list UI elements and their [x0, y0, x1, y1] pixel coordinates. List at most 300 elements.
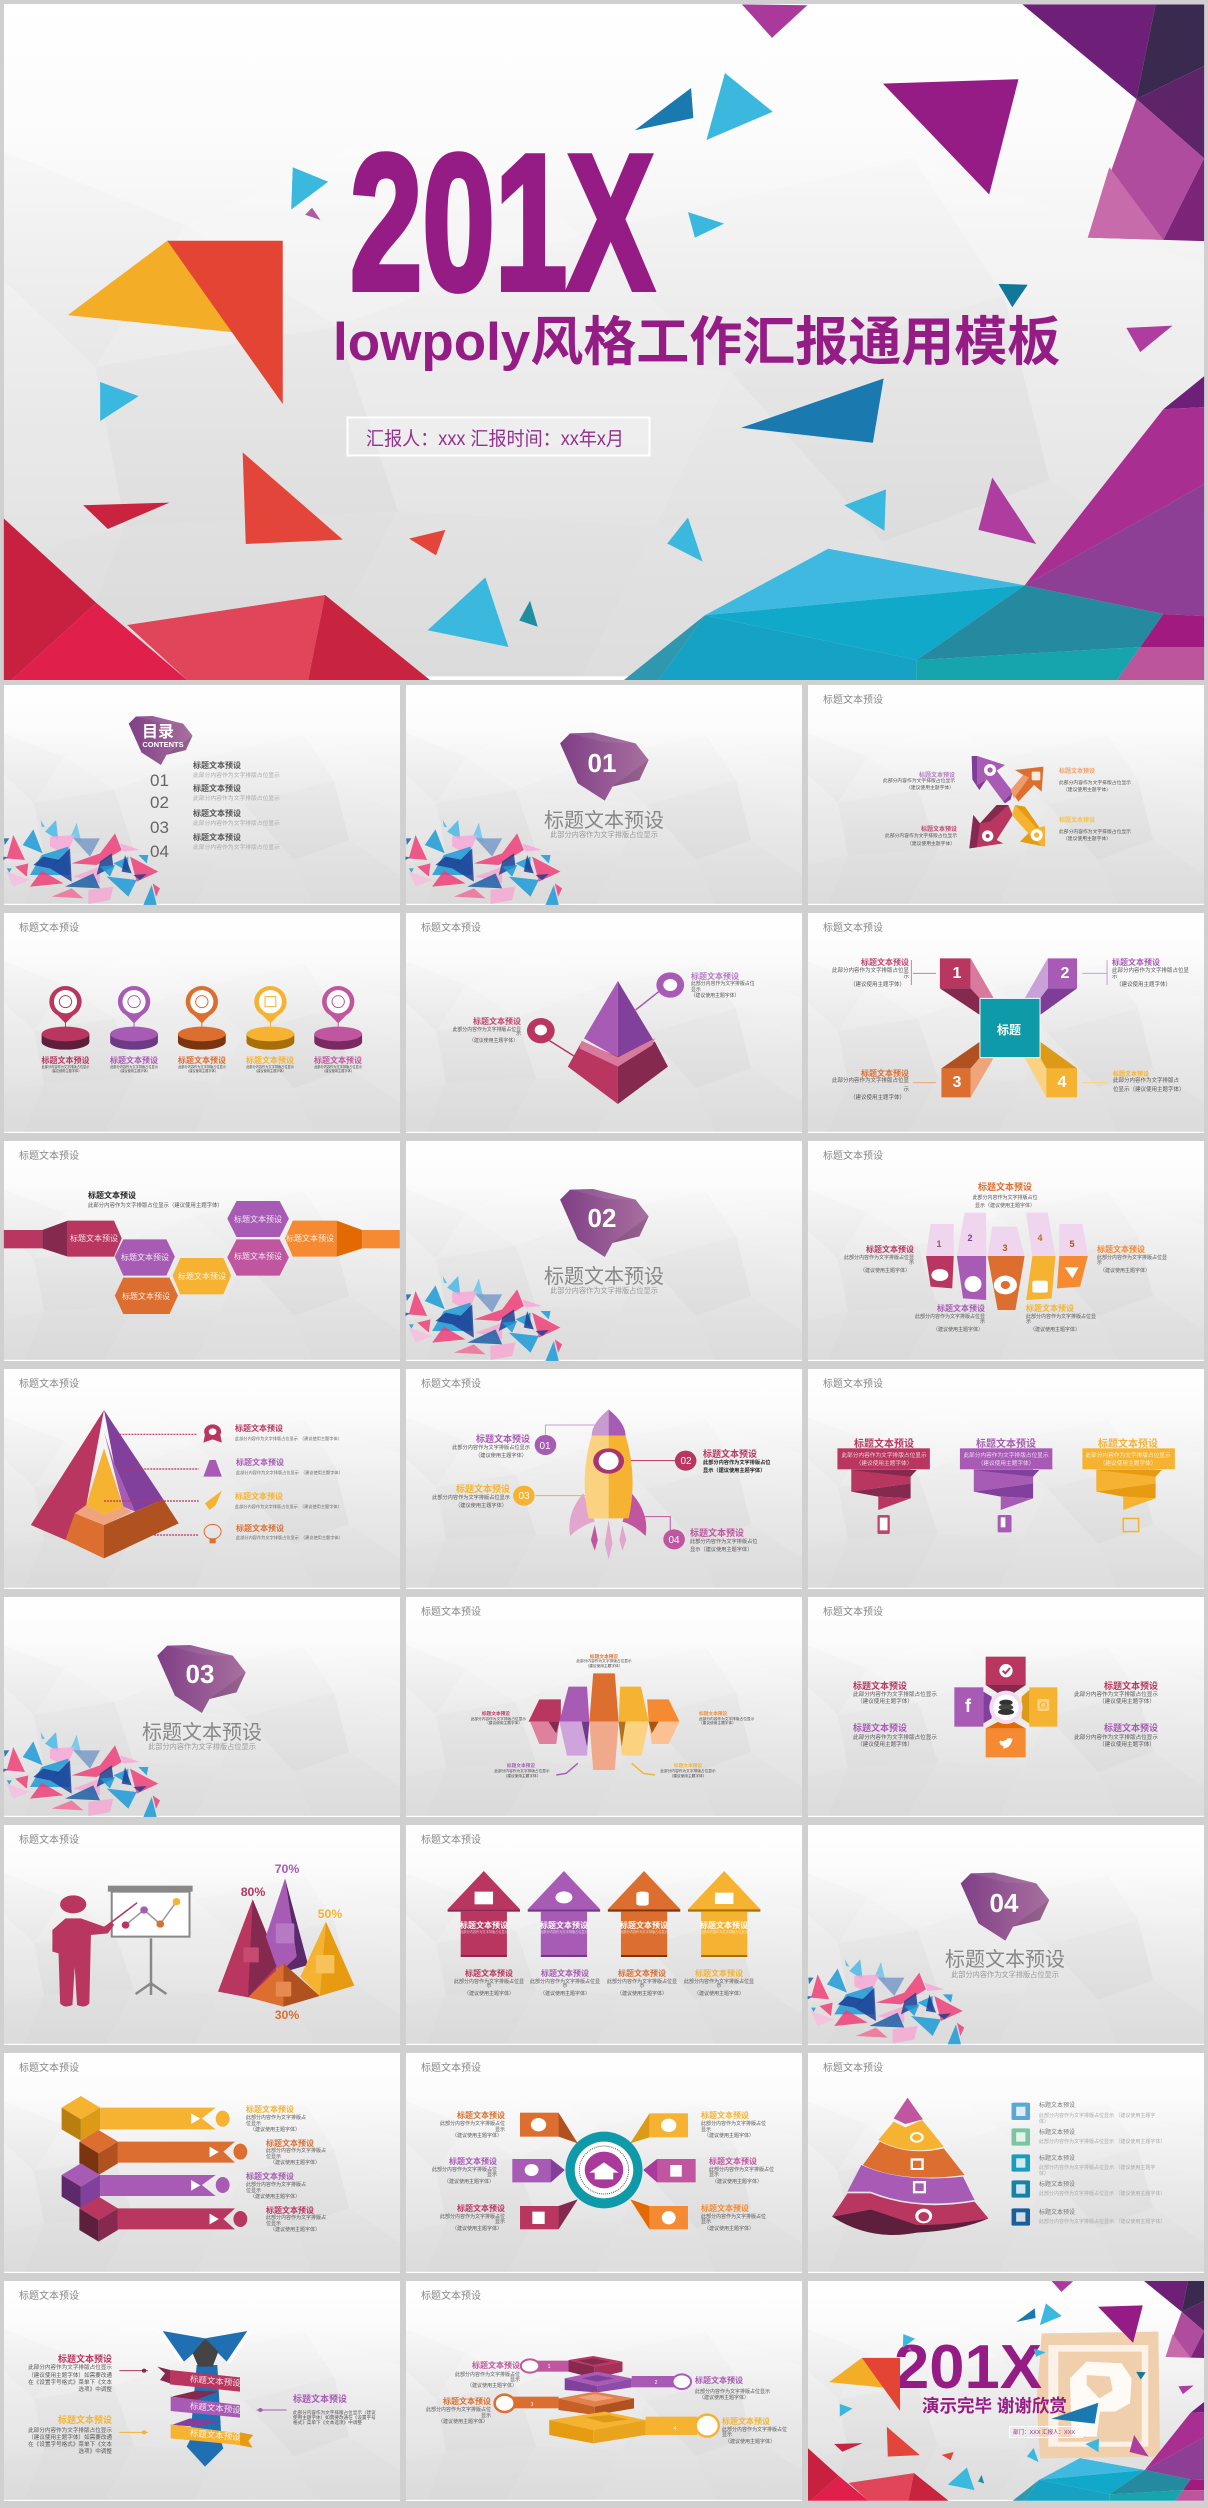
mosaic of triangles: [3, 820, 160, 905]
hub labels: 显示: [495, 2219, 505, 2225]
presenter info box: [348, 418, 650, 456]
social cross labels: 标题文本预设: [853, 1680, 907, 1691]
pyramid labels: 此部分内容作为文字排版占位显示 （建议使用主题字体）: [235, 1503, 342, 1510]
rocket labels: 标题文本预设: [456, 1483, 510, 1494]
section title: 标题文本预设: [544, 809, 664, 832]
slide heading: 标题文本预设: [823, 1605, 883, 1618]
arrow labels: 此部分内容作为文字排版占位显: [454, 1978, 524, 1985]
column numbers: [936, 1233, 1075, 1253]
pyramid labels: 此部分内容作为文字排版占位显示 （建议使用主题字体）: [235, 1435, 342, 1442]
box labels: 标题文本预设: [443, 2396, 491, 2406]
pin labels: 标题文本预设: [314, 1055, 362, 1065]
rocket labels: 标题文本预设: [476, 1433, 530, 1444]
four crossing arrows graphic: [969, 756, 1045, 848]
section badge 04: 04: [990, 1888, 1019, 1918]
X shape labels: （建议使用主题字体）: [1116, 980, 1171, 988]
X shape labels: 标题文本预设: [861, 1068, 909, 1078]
funnel labels: 标题文本预设: [976, 1437, 1036, 1450]
ribbon labels: 此部分内容作为文字排版占: [266, 2147, 326, 2154]
rocket labels: 此部分内容作为文字排版占位显示: [432, 1493, 510, 1501]
slide heading: 标题文本预设: [19, 2061, 79, 2074]
ribbon labels: 标题文本预设: [266, 2205, 314, 2215]
hexagon caption: [88, 1190, 223, 1209]
contents list: 此部分内容作为文字排版占位显示: [193, 843, 280, 851]
tie side labels: [28, 2353, 376, 2455]
peak bar labels: 此部分内容作为文字排版占位显示: [471, 1716, 526, 1721]
panel: presenter and mountains slide: [4, 1825, 400, 2045]
box labels: （建议使用主题字体）: [699, 2394, 749, 2401]
contents list: 标题文本预设: [193, 832, 241, 842]
panel: hero cover slide: [4, 4, 1204, 680]
panel: five social columns slide: [808, 1141, 1204, 1361]
box labels: 标题文本预设: [722, 2416, 770, 2426]
tie connector lines: [119, 2369, 287, 2434]
diamond labels: 此部分内容作为文字排版占位显: [453, 1026, 521, 1033]
X shape numbers and center label: 3: [953, 1074, 962, 1091]
column labels: 此部分内容作为文字排版占位显: [1097, 1254, 1167, 1261]
tie side labels: 在《设置字号格式》菜单下《文本: [28, 2378, 112, 2386]
tie side labels: （建议使用主题字体）如需要改通: [28, 2433, 112, 2441]
tie side labels: 此部分内容作为文字排版占位显示（建议: [293, 2409, 376, 2416]
slide heading: 标题文本预设: [823, 2061, 883, 2074]
ribbon labels: [246, 2104, 326, 2233]
pin labels: 标题文本预设: [110, 1055, 158, 1065]
cone list text: 标题文本预设: [1039, 2154, 1075, 2162]
labels for arrows: [883, 767, 1131, 847]
X shape labels: 示: [903, 1086, 909, 1093]
contents badge: 目录: [142, 723, 174, 741]
up arrows graphic: [448, 1871, 760, 1957]
hub labels: 此部分内容作为文字排版占位: [709, 2166, 774, 2173]
ribbon band labels: 标题文本预设: [189, 2401, 242, 2415]
ribbon band labels: 标题文本预设: [189, 2374, 242, 2388]
funnel labels: 标题文本预设: [1098, 1437, 1158, 1450]
slide heading: 标题文本预设: [19, 921, 79, 934]
panel: closing slide: [808, 2281, 1204, 2501]
panel: contents slide: [3, 685, 400, 905]
mosaic of triangles: [405, 820, 562, 905]
hub labels: 标题文本预设: [701, 2203, 749, 2213]
arrow labels: 标题文本预设: [541, 1968, 589, 1978]
hexagon labels: 标题文本预设: [178, 1271, 226, 1281]
pyramid labels: 此部分内容作为文字排版占位显示 （建议使用主题字体）: [236, 1534, 343, 1541]
funnel labels: （建议使用主题字体）: [1100, 1459, 1156, 1467]
peak bar labels: （建议使用主题字体）: [485, 1720, 522, 1725]
tie side labels: 标题文本预设: [58, 2414, 112, 2425]
arrow labels: 标题文本预设: [695, 1968, 743, 1978]
arrow labels: 此部分内容作为文字排版占位显示: [620, 1929, 668, 1934]
social cross labels: 标题文本预设: [1104, 1722, 1158, 1733]
arrow labels: 此部分内容作为文字排版占位显: [684, 1978, 754, 1985]
slide heading: 标题文本预设: [19, 1833, 79, 1846]
arrow labels: （建议使用主题字体）: [617, 1990, 667, 1997]
hub labels: （建议使用主题字体）: [704, 2225, 754, 2232]
tie side labels: 此部分内容作为文字排版占位显示: [28, 2363, 112, 2371]
labels for arrows: 此部分内容作为文字排版占位显示: [885, 832, 957, 839]
panel: social cross slide: [808, 1597, 1204, 1817]
X shape labels: 标题文本预设: [1113, 1070, 1149, 1078]
section badge 01: [560, 733, 649, 801]
arrow labels: 示: [716, 1983, 722, 1989]
box labels: 显示: [481, 2413, 491, 2419]
closing info box: [1010, 2426, 1082, 2438]
box numbers: 2: [655, 2380, 658, 2386]
hexagon labels: 标题文本预设: [121, 1252, 169, 1262]
column labels: 示: [1026, 1319, 1031, 1325]
funnel labels: 标题文本预设: [854, 1437, 914, 1450]
pyramid labels: 此部分内容作为文字排版占位显示 （建议使用主题字体）: [236, 1469, 343, 1476]
hexagon labels: 标题文本预设: [70, 1233, 118, 1243]
panel: section 03 slide: [3, 1597, 400, 1817]
arrow labels: 示: [486, 1983, 492, 1989]
cone list text: 标题文本预设: [1039, 2208, 1075, 2216]
cone list text: 此部分内容作为文字排版占位显示 （建议使用主题字体）: [1039, 2138, 1165, 2145]
section title: 此部分内容作为文字排版占位显示: [951, 1970, 1059, 1979]
column labels: 显示（建议使用主题字体）: [975, 1202, 1035, 1209]
hub labels: 显示: [701, 2127, 711, 2133]
pyramid labels: 标题文本预设: [235, 1491, 283, 1501]
cone list text: 此部分内容作为文字排版占位显示 （建议使用主题字体）: [1039, 2218, 1165, 2225]
panel: isometric boxes slide: [406, 2281, 802, 2501]
panel: hexagon chain slide: [4, 1141, 400, 1361]
X shape labels: 此部分内容作为文字排版占位显: [1112, 966, 1190, 974]
X shape numbers and center label: 标题: [997, 1022, 1021, 1037]
pin labels: 此部分内容作为文字排版占位显示: [246, 1064, 294, 1069]
hexagon labels: 标题文本预设: [234, 1214, 282, 1224]
contents list: 此部分内容作为文字排版占位显示: [193, 794, 280, 802]
funnel labels: [841, 1437, 1171, 1467]
contents list: [150, 760, 280, 861]
pyramid labels: 标题文本预设: [235, 1423, 283, 1433]
X shape labels: （建议使用主题字体）: [850, 1093, 905, 1101]
hub labels: 标题文本预设: [457, 2110, 505, 2120]
slide heading: 标题文本预设: [421, 2061, 481, 2074]
tie side labels: 使用主题字体）如需要改通在《设置字号: [293, 2414, 376, 2421]
box labels: 此部分内容作为文字排版占位: [722, 2426, 787, 2433]
layered pyramid graphic: [31, 1410, 222, 1558]
diamond labels: 此部分内容作为文字排版占位: [691, 980, 755, 987]
ribbon labels: 此部分内容作为文字排版占: [246, 2181, 306, 2188]
arrow labels: 此部分内容作为文字排版占位显示: [540, 1929, 588, 1934]
mountains percentage chart: [218, 1878, 354, 2007]
ribbon tie graphic: [157, 2331, 253, 2467]
contents badge: [129, 716, 193, 765]
column labels: （建议使用主题字体）: [933, 1326, 983, 1333]
section title: 标题文本预设: [544, 1265, 664, 1288]
facebook glyph: f: [965, 1696, 972, 1716]
peak bars graphic: [528, 1673, 679, 1775]
arrow labels: 标题文本预设: [700, 1920, 748, 1930]
X shape numbers and center label: 1: [953, 965, 962, 982]
arrow labels: 标题文本预设: [540, 1920, 588, 1930]
social cross labels: （建议使用主题字体）: [1099, 1697, 1155, 1705]
rocket labels: 此部分内容作为文字排版占位: [690, 1537, 757, 1545]
box labels: [426, 2360, 787, 2445]
social cross labels: 标题文本预设: [853, 1722, 907, 1733]
tie side labels: 选项》中调整: [78, 2447, 112, 2455]
diamond labels: 显示: [691, 987, 701, 993]
rocket numbered badges: [518, 1441, 692, 1546]
panel: cube ribbons slide: [4, 2053, 400, 2273]
social cross labels: 此部分内容作为文字排版占位显示: [853, 1690, 937, 1698]
arrow labels: （建议使用主题字体）: [464, 1990, 514, 1997]
percentage labels: 30%: [275, 2008, 299, 2022]
pyramid labels: 标题文本预设: [236, 1523, 284, 1533]
cone list text: 标题文本预设: [1039, 2101, 1075, 2109]
box numbers: [531, 2364, 677, 2432]
arrow labels: 示: [639, 1983, 645, 1989]
arrow labels: 此部分内容作为文字排版占位显: [530, 1978, 600, 1985]
box numbers: 3: [531, 2402, 534, 2408]
panel: five pins slide: [4, 913, 400, 1133]
hub labels: 此部分内容作为文字排版占位: [701, 2213, 766, 2220]
labels for arrows: 标题文本预设: [919, 771, 955, 779]
box labels: 显示: [722, 2432, 732, 2438]
arrow labels: 标题文本预设: [460, 1920, 508, 1930]
rocket labels: 此部分内容作为文字排版占位显示: [452, 1443, 530, 1451]
contents list: 01: [150, 771, 169, 790]
rocket labels: （建议使用主题字体）: [455, 1501, 507, 1509]
rocket labels: 显示（建议使用主题字体）: [703, 1466, 765, 1474]
arrow labels: [454, 1920, 754, 1997]
arrow labels: 标题文本预设: [618, 1968, 666, 1978]
ribbon labels: 标题文本预设: [246, 2104, 294, 2114]
column labels: 标题文本预设: [1026, 1303, 1074, 1313]
diamond labels: 标题文本预设: [691, 971, 739, 981]
hexagon labels: [70, 1214, 334, 1301]
X shape numbers and center label: 4: [1058, 1074, 1067, 1091]
ribbon labels: （建议使用主题字体）: [270, 2226, 320, 2233]
column labels: 此部分内容作为文字排版占位显: [1026, 1313, 1096, 1320]
peak bar labels: （建议使用主题字体）: [504, 1773, 540, 1778]
rocket labels: [432, 1433, 770, 1553]
hub labels: 标题文本预设: [709, 2156, 757, 2166]
X shape numbers and center label: [953, 965, 1070, 1091]
panel: rocket slide: [406, 1369, 802, 1589]
peak bar labels: 标题文本预设: [699, 1710, 727, 1717]
mosaic of triangles: [405, 1276, 562, 1361]
slide heading: 标题文本预设: [421, 1605, 481, 1618]
slide heading: 标题文本预设: [823, 1149, 883, 1162]
cone list text: 标题文本预设: [1039, 2180, 1075, 2188]
peak bar labels: 标题文本预设: [590, 1653, 618, 1660]
funnel labels: 此部分内容作为文字排版占位显示: [841, 1451, 927, 1459]
slide heading: 标题文本预设: [19, 2289, 79, 2302]
section title: 此部分内容作为文字排版占位显示: [550, 830, 658, 839]
X shape labels: 示: [903, 973, 909, 980]
pin labels: （建议使用主题字体）: [322, 1068, 354, 1073]
ribbon labels: 标题文本预设: [266, 2138, 314, 2148]
cone list text: 此部分内容作为文字排版占位显示 （建议使用主题字: [1039, 2164, 1155, 2171]
panel: section 02 slide: [405, 1141, 802, 1361]
column labels: （建议使用主题字体）: [1030, 1326, 1080, 1333]
tie side labels: 在《设置字号格式》菜单下《文本: [28, 2440, 112, 2448]
arrow labels: 此部分内容作为文字排版占位显示: [460, 1929, 508, 1934]
peak bar labels: 此部分内容作为文字排版占位显示: [576, 1658, 632, 1663]
tie side labels: （建议使用主题字体）如需要改通: [28, 2371, 112, 2379]
rocket labels: 此部分内容作为文字排版占位: [703, 1458, 770, 1466]
social cross graphic: [954, 1657, 1057, 1757]
hexagon chain graphic: [4, 1201, 400, 1314]
diamond labels: [453, 971, 755, 1044]
hub labels: （建议使用主题字体）: [452, 2132, 502, 2139]
funnel labels: 此部分内容作为文字排版占位显示: [963, 1451, 1049, 1459]
isometric boxes graphic: [495, 2356, 719, 2443]
column labels: 标题文本预设: [978, 1181, 1032, 1192]
pin labels: （建议使用主题字体）: [186, 1068, 218, 1073]
labels for arrows: 此部分内容作为文字排版占位显示: [883, 777, 955, 784]
hub labels: 标题文本预设: [449, 2156, 497, 2166]
diamond pyramid graphic: [527, 972, 684, 1104]
rocket numbered badges: 01: [539, 1441, 551, 1452]
X shape labels: 此部分内容作为文字排版占位显: [832, 966, 909, 974]
rocket labels: 显示（建议使用主题字体）: [690, 1545, 752, 1553]
pin labels: 标题文本预设: [178, 1055, 226, 1065]
peak bar labels: 标题文本预设: [507, 1762, 535, 1769]
panel: X numbered slide: [808, 913, 1204, 1133]
box labels: 标题文本预设: [695, 2375, 743, 2385]
ribbon band labels: [189, 2374, 242, 2442]
rocket labels: （建议使用主题字体）: [475, 1451, 527, 1459]
slide heading: 标题文本预设: [823, 1377, 883, 1390]
icon squares: [1012, 2103, 1030, 2226]
X shape labels: 示: [1112, 973, 1118, 980]
hub labels: 此部分内容作为文字排版占位: [440, 2120, 505, 2127]
mosaic of triangles: [808, 1959, 964, 2044]
hub labels: （建议使用主题字体）: [712, 2178, 762, 2185]
section badge 04: [961, 1873, 1049, 1941]
arrow labels: 标题文本预设: [465, 1968, 513, 1978]
arrow labels: （建议使用主题字体）: [694, 1990, 744, 1997]
slide heading: 标题文本预设: [19, 1377, 79, 1390]
presenter with board graphic: [52, 1886, 193, 2006]
peak bar labels: （建议使用主题字体）: [699, 1720, 736, 1725]
hexagon caption: 标题文本预设: [88, 1190, 136, 1200]
panel: four arrows slide: [808, 685, 1204, 905]
social cross labels: [853, 1680, 1158, 1748]
column numbers: 2: [967, 1233, 973, 1243]
slide heading: 标题文本预设: [823, 921, 883, 934]
social cross labels: 此部分内容作为文字排版占位显示: [853, 1733, 937, 1741]
ribbon labels: 位显示: [246, 2187, 261, 2194]
diamond labels: 标题文本预设: [473, 1016, 521, 1026]
X shape labels: 此部分内容作为文字排版占位显: [832, 1076, 909, 1084]
section title: 标题文本预设: [945, 1948, 1065, 1971]
map pins on disks: [42, 986, 362, 1050]
pin labels: 此部分内容作为文字排版占位显示: [178, 1064, 226, 1069]
rocket labels: 标题文本预设: [703, 1448, 757, 1459]
column numbers: 3: [1002, 1243, 1008, 1253]
labels for arrows: （建议使用主题字体）: [1063, 786, 1111, 793]
subtitle: lowpoly风格工作汇报通用模板: [333, 313, 1060, 372]
contents list: 标题文本预设: [193, 808, 241, 818]
X shape labels: （建议使用主题字体）: [850, 980, 905, 988]
section badge 03: [157, 1645, 246, 1713]
panel: four up arrows slide: [406, 1825, 802, 2045]
pin labels: 此部分内容作为文字排版占位显示: [110, 1064, 158, 1069]
diamond labels: （建议使用主题字体）: [691, 992, 739, 999]
contents list: 标题文本预设: [193, 783, 241, 793]
cone list text: 体）: [1039, 2170, 1049, 2177]
pin labels: 此部分内容作为文字排版占位显示: [42, 1064, 89, 1069]
peak bar labels: （建议使用主题字体）: [670, 1773, 706, 1778]
ribbon labels: （建议使用主题字体）: [270, 2159, 320, 2166]
X shape labels: 位显示（建议使用主题字体）: [1113, 1085, 1185, 1093]
percentage labels: 50%: [318, 1907, 342, 1921]
panel: ring hub slide: [406, 2053, 802, 2273]
hub labels: 此部分内容作为文字排版占位: [432, 2166, 497, 2173]
panel: ribbon tie slide: [4, 2281, 400, 2501]
box labels: 此部分内容作为文字排版占位: [455, 2371, 520, 2378]
contents list: 标题文本预设: [193, 760, 241, 770]
slide heading: 标题文本预设: [823, 693, 883, 706]
hub labels: 标题文本预设: [457, 2203, 505, 2213]
column numbers: 1: [936, 1239, 942, 1249]
percentage labels: [241, 1862, 342, 2022]
peak bar labels: 标题文本预设: [482, 1710, 510, 1717]
section badge 03: 03: [186, 1659, 214, 1689]
presenter info box: 汇报人：xxx 汇报时间：xx年x月: [366, 428, 624, 450]
rocket numbered badges: 03: [518, 1491, 530, 1502]
column labels: 标题文本预设: [937, 1303, 985, 1313]
hub labels: 显示: [701, 2219, 711, 2225]
X shape labels: 标题文本预设: [1112, 957, 1160, 967]
ribbon band labels: 标题文本预设: [189, 2428, 242, 2442]
X shape labels: [832, 957, 1190, 1101]
hub labels: 此部分内容作为文字排版占位: [440, 2213, 505, 2220]
cone list text: 标题文本预设: [1039, 2128, 1075, 2136]
arrow labels: （建议使用主题字体）: [540, 1990, 590, 1997]
hub labels: 显示: [495, 2127, 505, 2133]
pyramid labels: [235, 1423, 343, 1541]
box labels: （建议使用主题字体）: [725, 2438, 775, 2445]
rocket numbered badges: 04: [668, 1535, 680, 1546]
hub labels: （建议使用主题字体）: [452, 2225, 502, 2232]
closing title: 201X: [894, 2333, 1042, 2402]
column numbers: 4: [1037, 1233, 1043, 1243]
peak bar labels: [471, 1653, 755, 1778]
arrow labels: 示: [562, 1983, 568, 1989]
labels for arrows: 此部分内容作为文字排版占位显示: [1059, 828, 1131, 835]
social cross labels: （建议使用主题字体）: [857, 1740, 913, 1748]
cone list text: [1039, 2101, 1165, 2225]
peak bar labels: 此部分内容作为文字排版占位显示: [699, 1716, 755, 1721]
funnel labels: 此部分内容作为文字排版占位显示: [1085, 1451, 1171, 1459]
column labels: 标题文本预设: [866, 1244, 914, 1254]
box labels: （建议使用主题字体）: [438, 2418, 488, 2425]
slide heading: 标题文本预设: [421, 1377, 481, 1390]
pin labels: （建议使用主题字体）: [50, 1068, 81, 1073]
box labels: （建议使用主题字体）: [467, 2382, 517, 2389]
hub labels: 显示: [487, 2172, 497, 2178]
rocket graphic: [513, 1409, 696, 1559]
X shape graphic: [911, 958, 1107, 1097]
column labels: 此部分内容作为文字排版占位显: [844, 1254, 914, 1261]
hub labels: （建议使用主题字体）: [444, 2178, 494, 2185]
pin labels: 标题文本预设: [246, 1055, 294, 1065]
section badge 01: 01: [588, 748, 616, 778]
five columns graphic: [926, 1213, 1088, 1310]
labels for arrows: 标题文本预设: [1059, 816, 1095, 824]
watermark stamp: [1037, 2332, 1160, 2458]
contents list: 02: [150, 793, 169, 812]
box numbers: 1: [548, 2364, 551, 2370]
tie side labels: 格式》菜单下《文本选项》中调整: [293, 2419, 362, 2426]
ribbon labels: 此部分内容作为文字排版占: [266, 2214, 326, 2221]
labels for arrows: （建议使用主题字体）: [1063, 835, 1111, 842]
arrow labels: 此部分内容作为文字排版占位显示: [700, 1929, 748, 1934]
X shape numbers and center label: 2: [1061, 965, 1070, 982]
